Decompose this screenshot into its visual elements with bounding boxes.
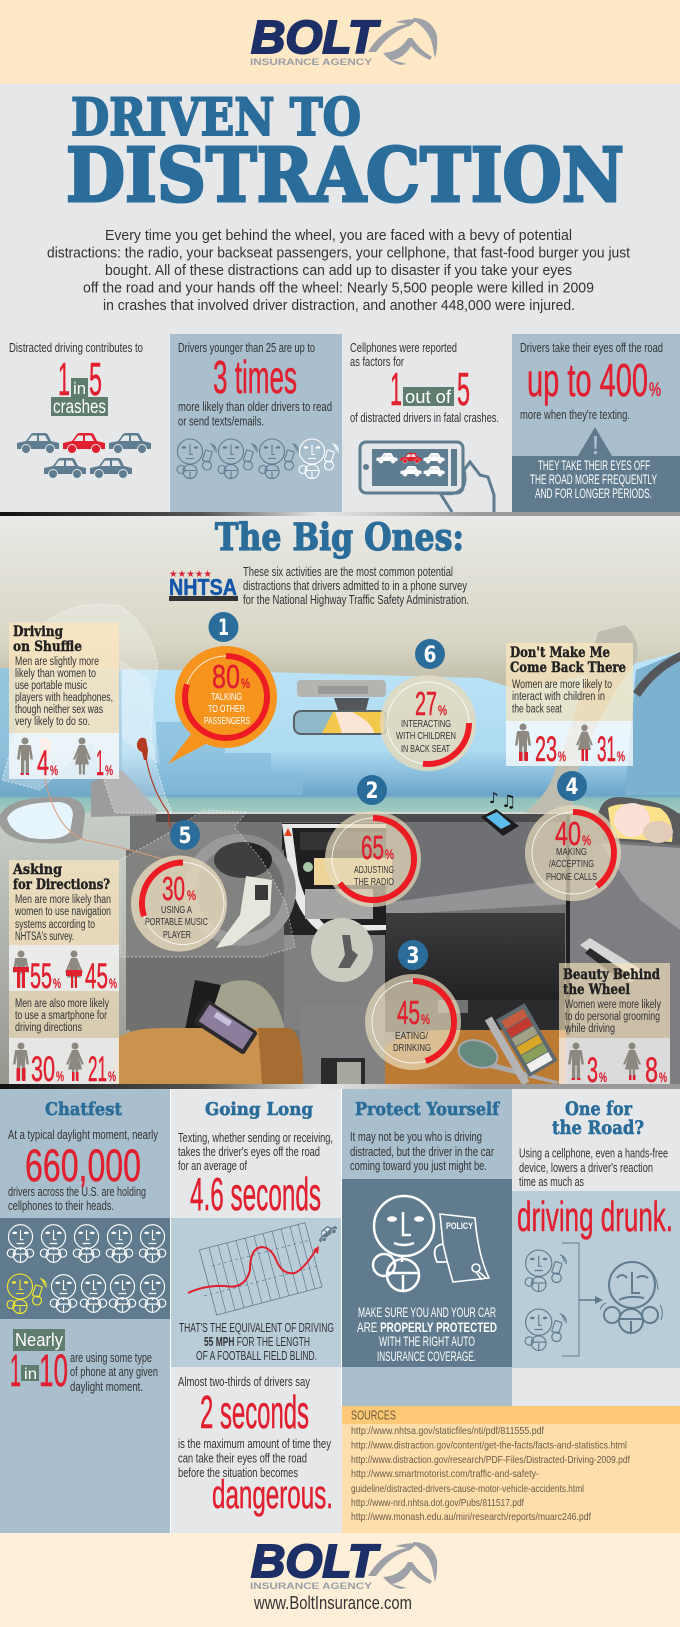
divider bar bottom <box>0 1084 680 1089</box>
panel: driving on shuffle: likely than women to <box>15 668 96 680</box>
panel: sources: guideline/distracted-drivers-cause-motor-vehicle-accidents.html <box>351 1483 584 1495</box>
callout: 2 adjusting the radio: % <box>385 846 394 862</box>
icon: phone on dashboard with music notes <box>481 789 519 836</box>
callout: 4 making accepting phone calls: % <box>582 832 591 848</box>
panel: 3 times: more likely than older drivers to read <box>178 400 332 414</box>
chart: football field with swerving path <box>188 1222 339 1315</box>
NHTSA description: for the National Highway Traffic Safety Administration. <box>243 593 469 607</box>
Bolt logo: INSURANCE AGENCY <box>250 57 373 68</box>
panel: 1 in 5 crashes <box>9 341 151 478</box>
NHTSA description <box>243 565 469 607</box>
men women stat 4 and 1 percent: % <box>105 762 113 778</box>
icon: earbuds and cable <box>40 738 170 860</box>
panel: going long: can take their eyes off the road <box>178 1452 307 1466</box>
right door <box>566 845 680 1084</box>
panel: going long: before the situation becomes <box>178 1466 298 1480</box>
panel: dont make me come back there <box>506 643 633 769</box>
callout: 5 using a portable music player: 30 <box>162 870 185 907</box>
panel: 1 in 5 crashes: 1 <box>58 353 70 405</box>
callout: 1 talking to other passengers: PASSENGERS <box>204 715 250 727</box>
panel: one for the road <box>512 1098 680 1368</box>
rearview mirror <box>293 680 388 735</box>
panel: one for the road: the Road? <box>552 1117 644 1139</box>
panel: asking for directions: Men are also more likely <box>15 998 109 1010</box>
heading: the big ones: The Big Ones: <box>215 515 464 559</box>
panel: going long: THAT'S THE EQUIVALENT OF DRIVING <box>179 1321 334 1335</box>
callout: 4 making accepting phone calls <box>525 771 621 901</box>
panel: the big ones car interior <box>0 515 680 1090</box>
panel: sources: http://www.smartmotorist.com/traffic-and-safety- <box>351 1468 539 1480</box>
panel: sources: SOURCES <box>351 1408 396 1422</box>
panel: driving on shuffle: Driving <box>13 624 63 640</box>
driver silhouette overlay <box>2 604 295 957</box>
divider bar top <box>0 512 680 516</box>
callout: 5 using a portable music player: USING A <box>161 904 192 916</box>
callout: 1 talking to other passengers: 80 <box>212 658 240 695</box>
panel: protect yourself: INSURANCE COVERAGE. <box>377 1349 476 1364</box>
callout: 2 adjusting the radio: 2 <box>366 779 378 804</box>
Bolt logo footer <box>250 1535 437 1592</box>
intro paragraph <box>47 228 630 314</box>
windshield <box>0 652 680 815</box>
intro paragraph: bought. All of these distractions can add up to disaster if you take your eyes <box>105 263 572 279</box>
panel: sources: http://www-nrd.nhtsa.dot.gov/Pubs/811517.pdf <box>351 1497 524 1509</box>
panel: going long: takes the driver's eyes off the road <box>178 1145 320 1159</box>
callout: 6 interacting with children: IN BACK SEAT <box>401 743 450 755</box>
men women stat 55 and 45 percent: 55 <box>30 957 52 996</box>
callout: 5 using a portable music player: % <box>187 887 196 903</box>
men women stat 23 and 31 percent: 23 <box>535 730 557 769</box>
callout: 2 adjusting the radio <box>325 775 421 907</box>
men women stat 55 and 45 percent: % <box>53 975 61 991</box>
men women stat 3 and 8 percent: % <box>599 1069 607 1085</box>
callout: 3 eating drinking: 3 <box>406 944 420 969</box>
panel: dont make me come back there: the back seat <box>512 704 563 716</box>
diagram: phone use equals drunk driver <box>525 1243 662 1356</box>
Bolt logo footer: BOLT <box>251 1535 381 1587</box>
panel: 1 out of 5: of distracted drivers in fatal crashes. <box>350 411 499 425</box>
panel: chatfest: drivers across the U.S. are holding <box>8 1185 146 1199</box>
men women stat 3 and 8 percent: % <box>659 1069 667 1085</box>
panel: protect yourself: Protect Yourself <box>355 1099 500 1120</box>
panel: asking for directions: NHTSA's survey. <box>15 931 74 943</box>
callout: 5 using a portable music player: PLAYER <box>163 929 191 941</box>
panel: sources: http://www.distraction.gov/content/get-the-facts/facts-and-statistics.html <box>351 1440 627 1452</box>
men women stat 23 and 31 percent: % <box>558 748 566 764</box>
panel: 3 times: or send texts/emails. <box>178 414 264 428</box>
men women stat 4 and 1 percent: 1 <box>96 744 104 783</box>
callout: 4 making accepting phone calls: 40 <box>555 815 581 852</box>
center stack <box>282 823 392 938</box>
panel: going long: dangerous. <box>212 1473 333 1517</box>
panel: going long: 55 MPH FOR THE LENGTH <box>204 1335 310 1349</box>
men women stat 30 and 21 percent: 21 <box>88 1050 107 1089</box>
panel: protect yourself <box>341 1089 512 1406</box>
callout: 3 eating drinking: EATING/ <box>395 1030 428 1042</box>
icon: phone with cars in hand <box>360 442 494 512</box>
men women stat 30 and 21 percent: % <box>108 1068 116 1084</box>
men women stat 4 and 1 percent: 4 <box>37 744 49 783</box>
icon: warning triangle <box>578 427 612 456</box>
callout: 4 making accepting phone calls: PHONE CALLS <box>546 871 597 883</box>
panel: beauty behind the wheel <box>559 963 670 1090</box>
icon: grid of ten drivers <box>7 1225 166 1314</box>
panel: going long: is the maximum amount of time they <box>178 1437 332 1451</box>
panel: up to 400 percent <box>512 334 680 512</box>
callout: 2 adjusting the radio: 65 <box>361 829 384 866</box>
panel: asking for directions: Asking <box>12 862 62 878</box>
icon: phone on dashboard with music notes: ♫ <box>501 792 516 812</box>
panel: protect yourself: coming toward you just might be. <box>350 1159 487 1173</box>
panel: driving on shuffle <box>9 622 119 783</box>
panel: chatfest: cellphones to their heads. <box>8 1199 114 1213</box>
right side mirror <box>598 797 680 845</box>
panel: driving on shuffle: Men are slightly more <box>15 656 99 668</box>
panel: protect yourself: It may not be you who is driving <box>350 1130 482 1144</box>
callout: 5 using a portable music player <box>131 820 235 955</box>
NHTSA logo: NHTSA <box>169 574 237 600</box>
men women stat 30 and 21 percent: % <box>56 1068 64 1084</box>
panel: 1 out of 5: out of <box>405 387 452 407</box>
panel: chatfest: At a typical daylight moment, nearly <box>8 1128 159 1142</box>
left side mirror <box>0 797 85 843</box>
men women stat 55 and 45 percent: 45 <box>85 957 108 996</box>
panel: beauty behind the wheel: while driving <box>564 1023 615 1035</box>
seat <box>115 1028 303 1084</box>
gear shift and console <box>284 918 385 1084</box>
panel: 3 times: Drivers younger than 25 are up to <box>178 341 315 355</box>
icon: phone on dashboard with music notes: ♪ <box>489 789 499 807</box>
icon: makeup palette <box>485 999 560 1085</box>
panel: chatfest <box>0 1089 170 1533</box>
panel: beauty behind the wheel: the Wheel <box>563 982 630 998</box>
left pillar <box>91 770 162 817</box>
panel: driving on shuffle: though neither sex was <box>15 704 103 716</box>
callout: 3 eating drinking: 45 <box>397 994 420 1031</box>
men women stat 30 and 21 percent <box>13 1042 116 1089</box>
callout: 4 making accepting phone calls: 4 <box>566 775 578 800</box>
icon: drivers on phones <box>177 439 338 478</box>
icon: phone on seat <box>193 1000 258 1055</box>
footer with logo <box>0 1533 680 1627</box>
men women stat 4 and 1 percent: % <box>50 762 58 778</box>
icon: cars <box>17 433 151 478</box>
panel: going long: Going Long <box>205 1099 313 1120</box>
stat: nearly 1 in 10: 1 <box>10 1345 21 1396</box>
panel: dont make me come back there: interact with children in <box>512 691 605 703</box>
men women stat 3 and 8 percent <box>568 1042 667 1090</box>
men women stat 30 and 21 percent: 30 <box>31 1050 55 1089</box>
panel: 1 out of 5 <box>350 341 499 512</box>
callout: 3 eating drinking <box>365 940 461 1070</box>
icon: driver with policy: POLICY <box>446 1221 473 1231</box>
callout: 6 interacting with children: % <box>438 702 447 718</box>
panel: going long: 4.6 seconds <box>190 1168 321 1220</box>
Bolt logo: BOLT <box>251 11 381 63</box>
panel: chatfest: 660,000 <box>25 1140 141 1191</box>
men women stat 23 and 31 percent <box>515 724 625 769</box>
stat: nearly 1 in 10: of phone at any given <box>70 1365 158 1379</box>
panel: asking for directions: to use a smartphone for <box>15 1010 107 1022</box>
callout: 1 talking to other passengers: TALKING <box>211 691 242 703</box>
panel: asking for directions: women to use navigation <box>14 906 111 918</box>
Bolt logo footer: INSURANCE AGENCY <box>250 1581 373 1592</box>
panel: 3 times: 3 times <box>213 351 297 403</box>
callout: 6 interacting with children: INTERACTING <box>401 718 451 730</box>
panel: 3 times <box>170 334 342 512</box>
icon: driver with policy <box>373 1196 489 1291</box>
website url: www.BoltInsurance.com <box>253 1593 412 1613</box>
panel: up to 400 percent: % <box>649 380 661 401</box>
panel: going long: for an average of <box>178 1159 247 1173</box>
panel: protect yourself: distracted, but the driver in the car <box>350 1145 494 1159</box>
panel: 1 in 5 crashes: in <box>73 379 86 398</box>
right upper dash <box>385 820 570 903</box>
panel: one for the road: time as much as <box>519 1175 584 1189</box>
icon: hairbrush <box>455 1035 560 1084</box>
panel: going long: Texting, whether sending or receiving, <box>178 1131 333 1145</box>
callout: 4 making accepting phone calls: MAKING <box>556 846 587 858</box>
panel: 1 in 5 crashes: crashes <box>53 397 106 418</box>
callout: 2 adjusting the radio: THE RADIO <box>354 876 394 888</box>
panel: 1 in 5 crashes: 5 <box>89 353 102 405</box>
dashboard base <box>0 813 680 1084</box>
stat: nearly 1 in 10: daylight moment. <box>70 1380 143 1394</box>
panel: going long: OF A FOOTBALL FIELD BLIND. <box>196 1349 317 1363</box>
panel: sources <box>342 1406 680 1533</box>
callout: 4 making accepting phone calls: /ACCEPTING <box>549 858 594 870</box>
panel: chatfest: Chatfest <box>45 1099 123 1120</box>
intro paragraph: off the road and your hands off the wheel: Nearly 5,500 people were killed in 2009 <box>83 280 594 296</box>
callout: 6 interacting with children: 27 <box>415 685 437 722</box>
callout: 6 interacting with children: WITH CHILDREN <box>396 730 456 742</box>
panel: up to 400 percent: more when they're texting. <box>520 408 630 422</box>
panel: asking for directions: driving directions <box>15 1022 82 1034</box>
stat: nearly 1 in 10: Nearly <box>15 1330 63 1350</box>
callout: 2 adjusting the radio: ADJUSTING <box>354 864 394 876</box>
right pillar <box>525 625 680 813</box>
men women stat 55 and 45 percent: % <box>109 975 117 991</box>
header band with logo <box>0 0 680 84</box>
panel: 1 out of 5: 5 <box>457 363 470 415</box>
panel: sources: http://www.nhtsa.gov/staticfiles/nti/pdf/811555.pdf <box>351 1425 544 1437</box>
panel: protect yourself: MAKE SURE YOU AND YOUR CAR <box>358 1305 496 1320</box>
panel: asking for directions: for Directions? <box>13 877 110 893</box>
intro paragraph: in crashes that involved driver distraction, and another 448,000 were injured. <box>103 298 575 314</box>
stat: nearly 1 in 10: 10 <box>39 1345 68 1396</box>
stat: nearly 1 in 10 <box>10 1329 158 1396</box>
illustration: car interior <box>0 516 680 1085</box>
Bolt logo <box>250 11 437 68</box>
panel: dont make me come back there: Women are more likely to <box>512 679 612 691</box>
panel: going long <box>170 1089 342 1533</box>
callout: 1 talking to other passengers <box>168 612 277 764</box>
panel: 1 in 5 crashes: Distracted driving contributes to <box>9 341 143 355</box>
stat: nearly 1 in 10: are using some type <box>70 1351 152 1365</box>
steering area <box>126 840 290 1030</box>
stat: nearly 1 in 10: in <box>24 1366 37 1383</box>
panel: asking for directions: systems according to <box>15 919 95 931</box>
men women stat 55 and 45 percent <box>13 950 117 996</box>
panel: one for the road: One for <box>565 1098 633 1120</box>
callout: 1 talking to other passengers: TO OTHER <box>208 703 245 715</box>
men women stat 23 and 31 percent: % <box>617 748 625 764</box>
callout: 3 eating drinking: DRINKING <box>393 1042 431 1054</box>
panel: sources: http://www.monash.edu.au/miri/research/reports/muarc246.pdf <box>351 1511 591 1523</box>
panel: protect yourself: ARE PROPERLY PROTECTED <box>357 1320 497 1335</box>
panel: driving on shuffle: use portable music <box>15 680 87 692</box>
men women stat 23 and 31 percent: 31 <box>597 730 616 769</box>
men women stat 4 and 1 percent <box>17 738 113 783</box>
panel: driving on shuffle: players with headphones, <box>15 692 113 704</box>
callout: 6 interacting with children: 6 <box>424 643 436 668</box>
panel: 1 out of 5: 1 <box>390 363 402 415</box>
panel: protect yourself: WITH THE RIGHT AUTO <box>379 1334 475 1349</box>
panel: dont make me come back there: Come Back There <box>510 660 626 676</box>
panel: asking for directions <box>9 860 119 1089</box>
callout: 3 eating drinking: % <box>421 1011 430 1027</box>
panel: driving on shuffle: very likely to do so. <box>15 716 90 728</box>
panel: going long: Almost two-thirds of drivers say <box>178 1375 311 1389</box>
callout: 1 talking to other passengers: 1 <box>218 616 229 641</box>
men women stat 3 and 8 percent: 8 <box>645 1051 658 1090</box>
callout: 1 talking to other passengers: % <box>241 675 250 691</box>
callout: 5 using a portable music player: PORTABLE MUSIC <box>145 916 208 928</box>
title: DISTRACTION <box>66 133 624 219</box>
callout: 6 interacting with children <box>380 639 476 771</box>
callout: 5 using a portable music player: 5 <box>178 824 192 849</box>
title <box>66 88 624 219</box>
panel: asking for directions: Men are more likely than <box>15 894 111 906</box>
panel: 1 out of 5: Cellphones were reported <box>350 341 457 355</box>
panel: 1 out of 5: as factors for <box>350 355 404 369</box>
panel: going long: 2 seconds <box>200 1386 309 1438</box>
NHTSA logo: ★★★★★ <box>169 569 212 580</box>
panel: beauty behind the wheel: Beauty Behind <box>563 967 660 983</box>
panel: driving on shuffle: on Shuffle <box>13 639 82 655</box>
men women stat 3 and 8 percent: 3 <box>587 1051 598 1090</box>
NHTSA description: distractions that drivers admitted to in a phone survey <box>243 579 468 593</box>
title: DRIVEN TO <box>71 88 361 148</box>
panel: dont make me come back there: Don't Make Me <box>510 645 610 661</box>
NHTSA description: These six activities are the most common potential <box>243 565 453 579</box>
intro paragraph: Every time you get behind the wheel, you are faced with a bevy of potential <box>105 228 572 244</box>
intro paragraph: distractions: the radio, your backseat passengers, your cellphone, that fast-food burger you just <box>47 246 630 262</box>
